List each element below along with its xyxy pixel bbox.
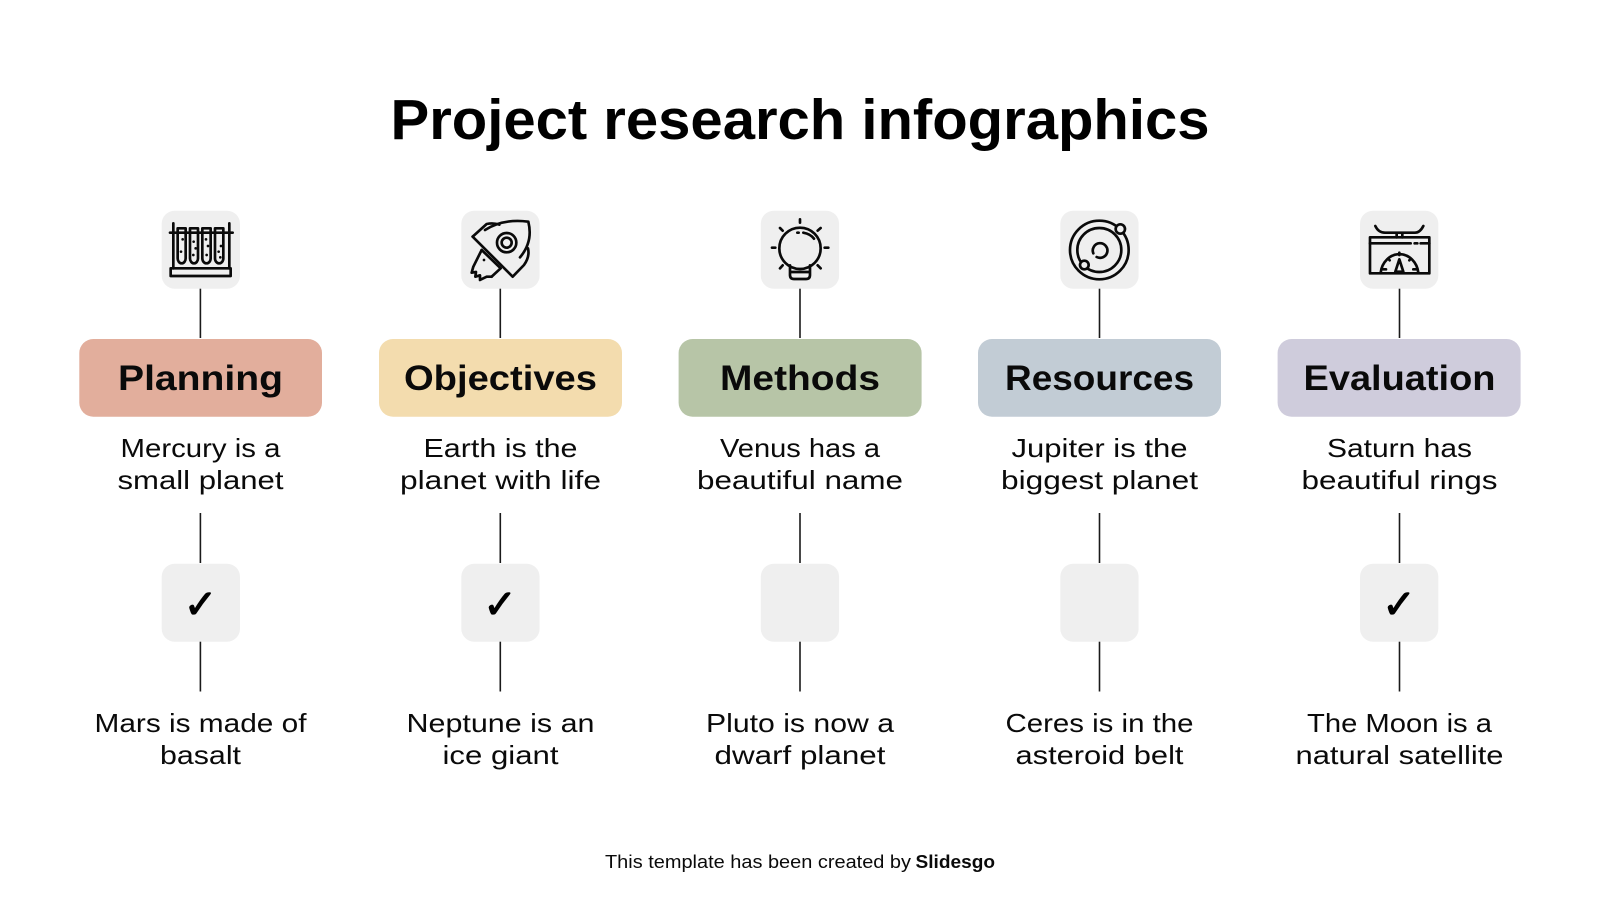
status tile: empty: [1060, 564, 1139, 642]
text: Planning description: [118, 433, 284, 495]
text: Planning note: [94, 708, 307, 770]
icon: rocket: [461, 211, 540, 289]
text: Resources note: Ceres is in the: [1006, 708, 1194, 738]
text: Evaluation note: natural satellite: [1296, 740, 1504, 770]
heading: Resources: Resources: [1005, 359, 1194, 398]
status tile: empty: [761, 564, 839, 642]
connector: icon to heading: [1398, 289, 1400, 338]
text: Evaluation note: The Moon is a: [1307, 708, 1493, 738]
text: Methods description: [697, 433, 903, 495]
text: Planning note: basalt: [160, 740, 242, 770]
column: Methods: [679, 211, 922, 770]
connector: text to status: [1098, 513, 1100, 563]
text: Objectives note: Neptune is an: [406, 708, 594, 738]
connector: status to note: [499, 642, 501, 692]
text: Methods description: Venus has a: [720, 433, 881, 463]
text: Evaluation description: Saturn has: [1327, 433, 1472, 463]
status tile: checked: ✓: [483, 582, 517, 628]
connector: text to status: [499, 513, 501, 563]
text: Objectives note: ice giant: [442, 740, 559, 770]
text: Evaluation note: [1296, 708, 1504, 770]
heading: Objectives: [379, 339, 622, 417]
connector: text to status: [799, 513, 801, 563]
text: Objectives description: planet with life: [400, 465, 601, 495]
connector: icon to heading: [1098, 289, 1100, 338]
text: Methods description: beautiful name: [697, 465, 903, 495]
column: Objectives: [379, 211, 622, 770]
heading: Planning: [79, 339, 322, 417]
status tile: checked: [461, 564, 540, 642]
text: Objectives description: [400, 433, 601, 495]
text: Objectives note: [406, 708, 594, 770]
connector: status to note: [199, 642, 201, 692]
text: Planning description: small planet: [118, 465, 284, 495]
status tile: checked: [162, 564, 240, 642]
heading: Planning: Planning: [118, 359, 283, 398]
text: Resources description: biggest planet: [1001, 465, 1199, 495]
heading: Evaluation: Evaluation: [1304, 359, 1496, 398]
connector: status to note: [1098, 642, 1100, 692]
connector: status to note: [799, 642, 801, 692]
heading: Objectives: Objectives: [404, 359, 597, 398]
text: Evaluation description: beautiful rings: [1302, 465, 1498, 495]
status tile: checked: ✓: [1382, 582, 1416, 628]
text: Objectives description: Earth is the: [424, 433, 578, 463]
icon: light bulb: [761, 211, 839, 289]
footer credit: Slidesgo: [916, 852, 995, 872]
heading: Methods: Methods: [720, 359, 880, 398]
status tile: checked: ✓: [184, 582, 217, 628]
heading: Methods: [679, 339, 922, 417]
icon: orbit: [1060, 211, 1139, 289]
connector: text to status: [199, 513, 201, 563]
heading: Resources: [978, 339, 1221, 417]
text: Planning note: Mars is made of: [94, 708, 307, 738]
text: Resources note: [1006, 708, 1194, 770]
title: Project research infographics: [390, 88, 1210, 152]
heading: Evaluation: [1278, 339, 1521, 417]
text: Evaluation description: [1302, 433, 1498, 495]
connector: status to note: [1398, 642, 1400, 692]
text: Planning description: Mercury is a: [120, 433, 281, 463]
column: Evaluation: [1278, 211, 1521, 770]
text: Methods note: dwarf planet: [714, 740, 886, 770]
text: Methods note: [706, 708, 895, 770]
column: Resources: [978, 211, 1221, 770]
connector: icon to heading: [799, 289, 801, 338]
text: Resources description: Jupiter is the: [1012, 433, 1188, 463]
footer credit: This template has been created by: [605, 852, 911, 872]
icon: weighing scale: [1360, 211, 1438, 289]
text: Methods note: Pluto is now a: [706, 708, 895, 738]
column: Planning: [79, 211, 322, 770]
connector: icon to heading: [199, 289, 201, 338]
text: Resources note: asteroid belt: [1016, 740, 1184, 770]
icon: test tubes: [162, 211, 240, 289]
status tile: checked: [1360, 564, 1438, 642]
connector: icon to heading: [499, 289, 501, 338]
text: Resources description: [1001, 433, 1199, 495]
connector: text to status: [1398, 513, 1400, 563]
